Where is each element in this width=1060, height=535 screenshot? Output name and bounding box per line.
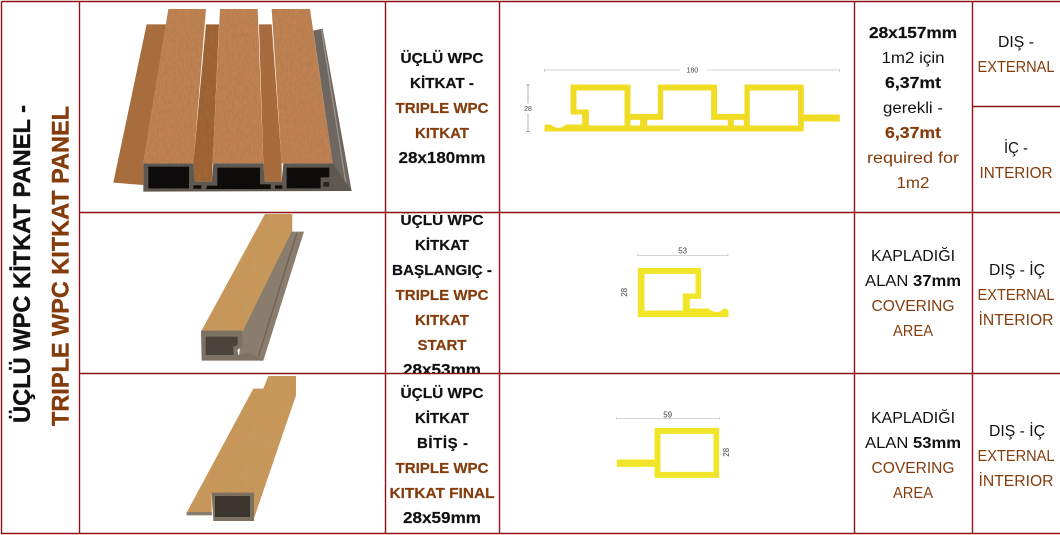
product name: triple panel [396, 50, 489, 167]
details: start coverage: AREA [893, 323, 934, 340]
product name: start profile: KİTKAT [415, 237, 469, 254]
height dimension [523, 85, 533, 132]
side title: rotated heading [9, 105, 74, 426]
product name: triple panel: KITKAT [415, 125, 469, 142]
details: start coverage [865, 248, 961, 340]
details: start coverage: KAPLADIĞI [871, 248, 955, 265]
details: triple panel coverage: 1m2 [896, 175, 930, 192]
profile diagram: final 59x28 [617, 410, 731, 477]
details: triple panel coverage [867, 25, 959, 192]
details: final coverage [865, 410, 961, 502]
usage: external and interior, start: DIŞ - İÇ [989, 261, 1045, 279]
height dimension: 28 [722, 447, 731, 457]
product name: start profile: START [418, 337, 466, 354]
product name: start profile [392, 212, 492, 379]
usage: external and interior, final: EXTERNAL [978, 448, 1055, 465]
width dimension: 53 [678, 247, 688, 256]
product name: triple panel: 28x180mm [398, 150, 486, 167]
product name: triple panel: KİTKAT - [410, 75, 474, 92]
details: triple panel coverage: 1m2 için [882, 50, 944, 67]
details: triple panel coverage: 28x157mm [869, 25, 957, 42]
product name: final profile [390, 385, 494, 527]
details: start coverage: COVERING [872, 298, 954, 315]
product name: final profile: TRIPLE WPC [396, 460, 489, 477]
details: start coverage: ALAN 37mm [865, 273, 961, 290]
product name: final profile: ÜÇLÜ WPC [400, 385, 484, 402]
usage: external and interior, start: İNTERIOR [978, 311, 1054, 329]
product name: triple panel: ÜÇLÜ WPC [400, 50, 484, 67]
details: triple panel coverage: 6,37mt [885, 75, 942, 92]
usage: external: EXTERNAL [978, 59, 1055, 76]
height dimension: 28 [620, 287, 629, 297]
details: final coverage: ALAN 53mm [865, 435, 961, 452]
heading line: English: TRIPLE WPC KITKAT PANEL [48, 106, 74, 426]
profile diagram: start 53x28 [620, 247, 728, 317]
profile diagram: triple panel 180x28 [523, 67, 839, 132]
details: final coverage: KAPLADIĞI [871, 410, 955, 427]
product photo: triple panel [113, 9, 352, 192]
usage: external and interior, final: DIŞ - İÇ [989, 422, 1045, 440]
product name: final profile: KITKAT FINAL [390, 485, 494, 502]
product name: start profile: KITKAT [415, 312, 469, 329]
usage: external [978, 34, 1055, 76]
yellow section [545, 85, 839, 131]
product name: start profile: ÜÇLÜ WPC [400, 212, 484, 229]
yellow section [617, 428, 719, 477]
width dimension: 180 [686, 67, 698, 74]
heading line: Turkish: ÜÇLÜ WPC KİTKAT PANEL - [9, 105, 36, 423]
details: triple panel coverage: 6,37mt [885, 125, 942, 142]
details: triple panel coverage: required for [867, 150, 959, 167]
usage: external and interior, final: İNTERIOR [978, 472, 1054, 490]
usage: external: DIŞ - [998, 34, 1034, 51]
product photo: start profile [201, 214, 304, 361]
product name: start profile: 28x53mm [403, 362, 481, 379]
height dimension: 28 [524, 106, 532, 113]
usage: interior [980, 139, 1052, 182]
product name: final profile: 28x59mm [403, 510, 481, 527]
product photo: final profile [187, 376, 296, 521]
yellow section [638, 268, 728, 317]
usage: interior: İÇ - [1004, 139, 1028, 157]
width dimension: 59 [663, 410, 673, 419]
details: final coverage: AREA [893, 485, 934, 502]
product name: start profile: BAŞLANGIÇ - [392, 262, 492, 279]
product name: triple panel: TRIPLE WPC [396, 100, 489, 117]
product name: final profile: BİTİŞ - [417, 435, 468, 452]
product name: start profile: TRIPLE WPC [396, 287, 489, 304]
usage: external and interior, start [978, 261, 1055, 329]
width dimension [544, 67, 839, 74]
usage: external and interior, start: EXTERNAL [978, 287, 1055, 304]
usage: external and interior, final [978, 422, 1055, 490]
product name: final profile: KİTKAT [415, 410, 469, 427]
usage: interior: INTERIOR [980, 165, 1052, 182]
details: final coverage: COVERING [872, 460, 954, 477]
details: triple panel coverage: gerekli - [883, 100, 943, 117]
